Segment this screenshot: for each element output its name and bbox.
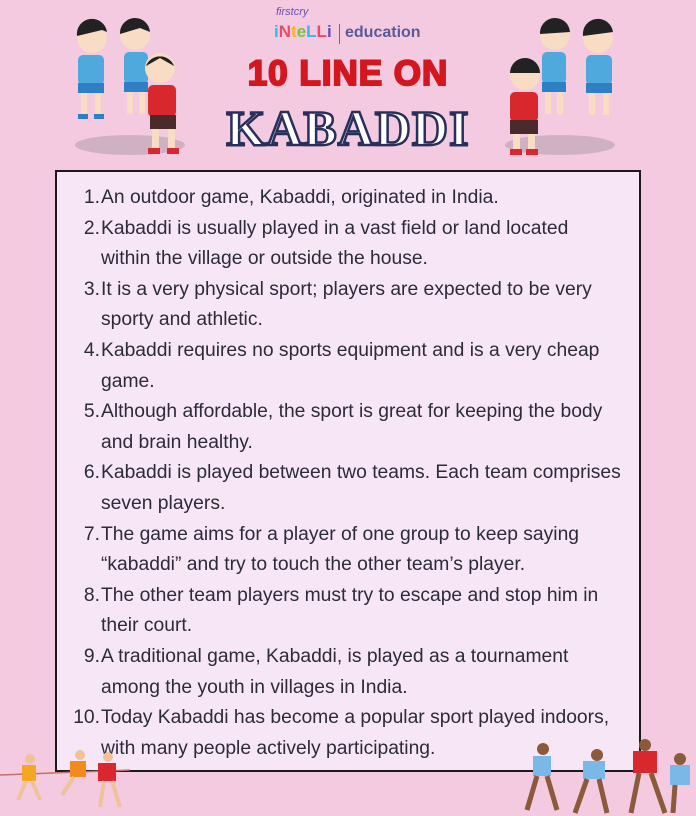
- panel: list of lines: sporty and athletic.: [101, 309, 263, 330]
- illustration: right players: [505, 18, 615, 155]
- panel: list of lines: [55, 170, 641, 772]
- illustration: bottom left players: [0, 750, 130, 808]
- logo: [274, 6, 421, 44]
- panel: list of lines: with many people actively participating.: [101, 738, 435, 759]
- panel: list of lines: 2.: [84, 218, 100, 239]
- panel: list of lines: their court.: [101, 615, 192, 636]
- panel: list of lines: Although affordable, the sport is great for keeping the body: [101, 401, 602, 422]
- title: 10 line on: 10 LINE ON: [248, 54, 448, 93]
- panel: list of lines: 4.: [84, 340, 100, 361]
- panel: list of lines: among the youth in villages in India.: [101, 676, 408, 698]
- panel: list of lines: Kabaddi requires no sports equipment and is a very cheap: [101, 340, 599, 361]
- logo: firstcry: [276, 6, 308, 18]
- panel: list of lines: 6.: [84, 462, 100, 483]
- panel: list of lines: The game aims for a player of one group to keep saying: [101, 524, 579, 545]
- panel: list of lines: game.: [101, 371, 155, 392]
- panel: list of lines: It is a very physical sport; players are expected to be very: [101, 279, 592, 300]
- panel: list of lines: 9.: [84, 646, 100, 667]
- panel: list of lines: 7.: [84, 524, 100, 545]
- panel: list of lines: “kabaddi” and try to touch the other team’s player.: [101, 554, 525, 575]
- panel: list of lines: 8.: [84, 585, 100, 606]
- panel: list of lines: 3.: [84, 279, 100, 300]
- illustration: left players: [75, 18, 185, 155]
- panel: list of lines: 10.: [73, 707, 100, 728]
- panel: list of lines: and brain healthy.: [101, 432, 253, 453]
- panel: list of lines: Kabaddi is usually played in a vast field or land located: [101, 218, 568, 239]
- panel: list of lines: A traditional game, Kabaddi, is played as a tournament: [101, 646, 568, 667]
- panel: list of lines: seven players.: [101, 493, 225, 514]
- logo: iNteLLi: [274, 22, 332, 41]
- panel: list of lines: Today Kabaddi has become a popular sport played indoors,: [101, 707, 609, 728]
- logo: education: [345, 24, 421, 41]
- panel: list of lines: An outdoor game, Kabaddi, originated in India.: [101, 187, 499, 208]
- panel: list of lines: Kabaddi is played between two teams. Each team comprises: [101, 462, 621, 483]
- illustration: bottom right players: [524, 739, 690, 814]
- panel: list of lines: 5.: [84, 401, 100, 422]
- title: kabaddi: KABADDI: [226, 100, 470, 156]
- panel: list of lines: within the village or outside the house.: [101, 248, 428, 269]
- panel: list of lines: 1.: [84, 187, 100, 208]
- panel: list of lines: The other team players must try to escape and stop him in: [101, 585, 598, 606]
